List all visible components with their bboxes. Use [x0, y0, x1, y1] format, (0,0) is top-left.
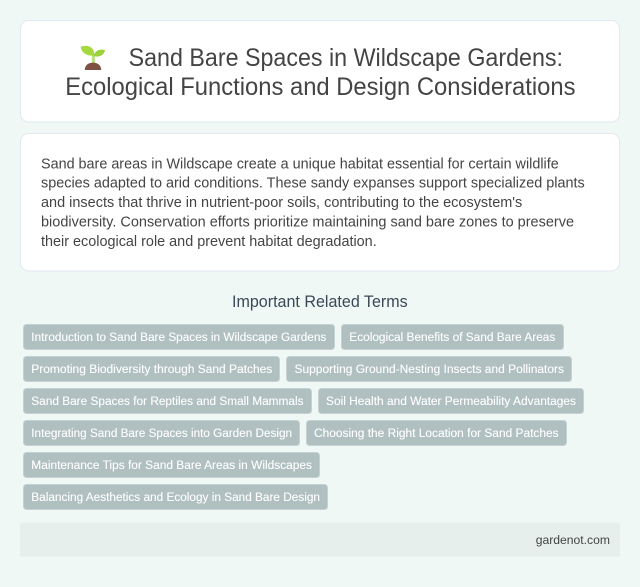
- tag: Promoting Biodiversity through Sand Patches: [31, 362, 272, 376]
- tag: Soil Health and Water Permeability Advantages: [326, 394, 576, 408]
- tag: [24, 324, 334, 350]
- footer: [20, 523, 620, 557]
- title: Sand Bare Spaces in Wildscape Gardens:: [129, 44, 563, 72]
- text block: description: their ecological role and prevent habitat degradation.: [41, 234, 377, 250]
- tag: [24, 356, 280, 382]
- title: [65, 44, 576, 101]
- heading: related terms: Important Related Terms: [232, 293, 408, 311]
- tag: [318, 388, 584, 414]
- tag: [286, 356, 572, 382]
- text block: description: [41, 156, 585, 250]
- tag: Maintenance Tips for Sand Bare Areas in Wildscapes: [31, 458, 312, 472]
- footer credit: gardenot.com: [536, 533, 610, 547]
- text block: description: species adapted to arid conditions. These sandy expanses support specialized plants: [41, 176, 585, 192]
- tag: [24, 388, 312, 414]
- title: Ecological Functions and Design Considerations: [65, 73, 576, 101]
- tag: [342, 324, 564, 350]
- text block: description: biodiversity. Conservation efforts prioritize maintaining sand bare zones to preserve: [41, 214, 574, 230]
- tag: Integrating Sand Bare Spaces into Garden Design: [31, 426, 292, 440]
- tag: Ecological Benefits of Sand Bare Areas: [349, 330, 555, 344]
- tag: [306, 420, 566, 446]
- tag: Balancing Aesthetics and Ecology in Sand Bare Design: [31, 490, 320, 504]
- tag: Supporting Ground-Nesting Insects and Pollinators: [294, 362, 564, 376]
- panel: header: [20, 20, 620, 122]
- text block: description: Sand bare areas in Wildscape create a unique habitat essential for certain wildlife: [41, 156, 559, 172]
- text block: description: and insects that thrive in nutrient-poor soils, contributing to the ecosystem's: [41, 195, 522, 211]
- panel: introduction: [20, 134, 620, 271]
- tag: [24, 484, 328, 510]
- tag: [24, 420, 300, 446]
- tag list: [24, 324, 584, 510]
- tag: Choosing the Right Location for Sand Patches: [314, 426, 559, 440]
- icon: seedling: [81, 46, 105, 70]
- tag: Sand Bare Spaces for Reptiles and Small Mammals: [31, 394, 304, 408]
- tag: Introduction to Sand Bare Spaces in Wildscape Gardens: [31, 330, 326, 344]
- tag: [24, 452, 320, 478]
